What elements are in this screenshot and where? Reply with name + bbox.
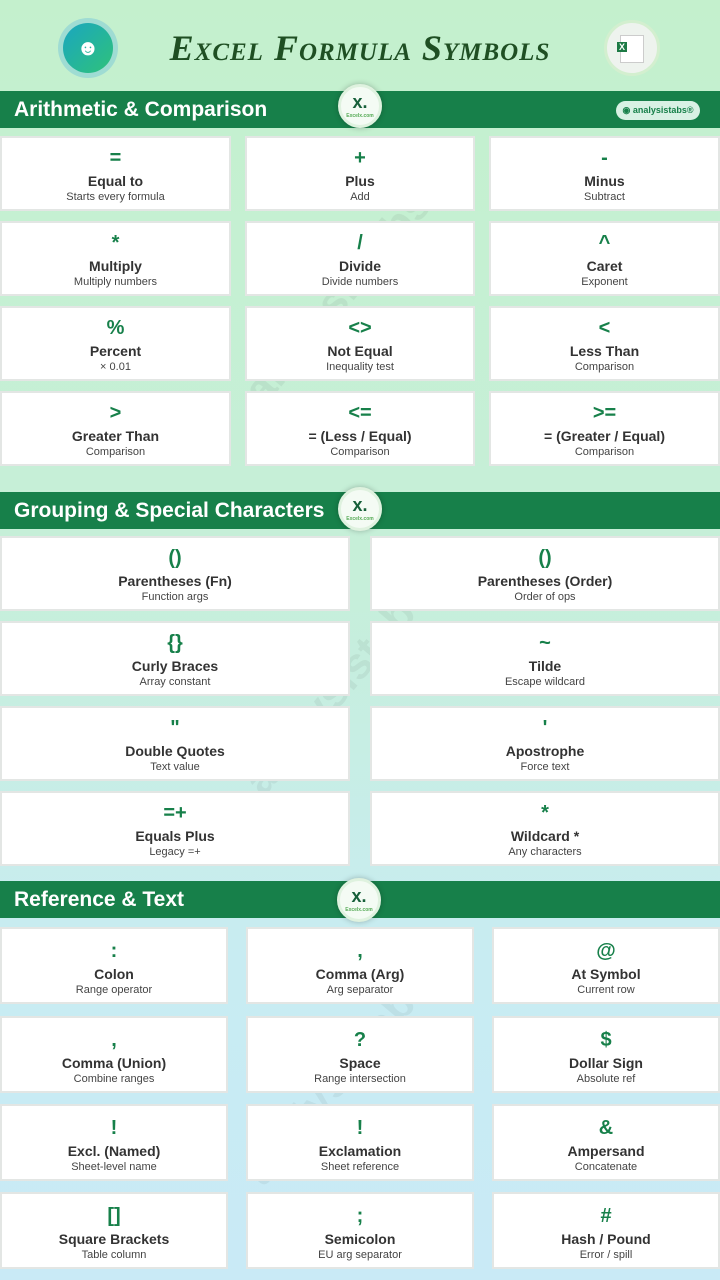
- panel: arithmetic cards: <: [599, 317, 610, 339]
- header icon: chat: ☻: [76, 35, 100, 60]
- panel: grouping cards: Legacy =+: [149, 846, 201, 858]
- panel: grouping cards: Equals Plus: [135, 828, 215, 844]
- panel: arithmetic cards: Comparison: [330, 446, 390, 458]
- logo: excelx 3: x.: [351, 886, 366, 906]
- panel: grouping cards: ~: [539, 632, 551, 654]
- panel: grouping cards: ": [170, 717, 180, 739]
- panel: grouping cards: (): [538, 547, 552, 569]
- text: analysistabs®: [234, 935, 462, 1194]
- panel: reference cards: Dollar Sign: [569, 1055, 643, 1071]
- panel: grouping cards: Curly Braces: [132, 658, 218, 674]
- panel: reference cards: Table column: [82, 1249, 146, 1261]
- panel: reference cards: #: [600, 1205, 612, 1227]
- panel: reference cards: Square Brackets: [59, 1231, 169, 1247]
- panel: arithmetic cards: Greater Than: [72, 428, 159, 444]
- banner: Grouping & Special Characters: [0, 492, 720, 529]
- panel: arithmetic cards: /: [357, 232, 363, 254]
- panel: reference cards: [0, 927, 720, 1269]
- panel: arithmetic cards: Add: [350, 191, 370, 203]
- banner: Grouping & Special Characters: Grouping & Special Characters: [14, 499, 324, 522]
- panel: reference cards: Sheet-level name: [71, 1161, 157, 1173]
- panel: arithmetic cards: Inequality test: [326, 361, 394, 373]
- panel: grouping cards: Any characters: [508, 846, 582, 858]
- logo: excelx 2: x.: [352, 495, 368, 515]
- panel: arithmetic cards: Plus: [345, 173, 375, 189]
- panel: arithmetic cards: Minus: [584, 173, 625, 189]
- panel: grouping cards: ': [543, 717, 547, 739]
- panel: grouping cards: Parentheses (Fn): [118, 573, 232, 589]
- panel: reference cards: &: [599, 1117, 613, 1139]
- panel: reference cards: Ampersand: [567, 1143, 645, 1159]
- panel: reference cards: @: [596, 940, 616, 962]
- panel: grouping cards: *: [541, 802, 549, 824]
- header icon: chat: [58, 18, 118, 78]
- panel: reference cards: Excl. (Named): [68, 1143, 160, 1159]
- panel: arithmetic cards: Equal to: [88, 173, 143, 189]
- panel: arithmetic cards: Divide: [339, 258, 381, 274]
- panel: reference cards: Error / spill: [580, 1249, 632, 1261]
- panel: reference cards: ?: [354, 1029, 366, 1051]
- panel: arithmetic cards: Multiply numbers: [74, 276, 157, 288]
- panel: reference cards: Exclamation: [319, 1143, 401, 1159]
- logo: excelx 3: Excelx.com: [345, 907, 373, 913]
- panel: grouping cards: =+: [163, 802, 187, 824]
- panel: reference cards: Space: [339, 1055, 381, 1071]
- panel: arithmetic cards: Caret: [587, 258, 622, 274]
- logo: analysistabs: ◉ analysistabs®: [622, 105, 694, 115]
- panel: arithmetic cards: =: [110, 147, 121, 169]
- panel: grouping cards: Parentheses (Order): [478, 573, 612, 589]
- panel: reference cards: Current row: [577, 984, 635, 996]
- panel: grouping cards: [0, 536, 720, 866]
- panel: reference cards: !: [111, 1117, 117, 1139]
- title: Excel Formula Symbols: [170, 28, 550, 68]
- header icon: excel file: X: [619, 42, 625, 52]
- panel: grouping cards: Double Quotes: [125, 743, 225, 759]
- panel: arithmetic cards: Not Equal: [327, 343, 393, 359]
- panel: grouping cards: {}: [167, 632, 183, 654]
- panel: reference cards: $: [600, 1029, 612, 1051]
- panel: reference cards: Hash / Pound: [561, 1231, 651, 1247]
- panel: arithmetic cards: >=: [593, 402, 616, 424]
- panel: arithmetic cards: Comparison: [86, 446, 145, 458]
- panel: reference cards: Colon: [94, 966, 134, 982]
- panel: arithmetic cards: Exponent: [581, 276, 628, 288]
- banner: Arithmetic & Comparison: [0, 91, 720, 128]
- panel: arithmetic cards: Less Than: [570, 343, 639, 359]
- watermarks: analysistabs®: [234, 155, 462, 414]
- panel: grouping cards: Text value: [150, 761, 200, 773]
- panel: arithmetic cards: <=: [348, 402, 372, 424]
- panel: reference cards: Sheet reference: [321, 1161, 399, 1173]
- panel: arithmetic cards: [0, 136, 720, 466]
- panel: arithmetic cards: = (Greater / Equal): [544, 428, 665, 444]
- logo: excelx: Excelx.com: [346, 113, 374, 119]
- panel: grouping cards: Apostrophe: [506, 743, 584, 759]
- banner: Arithmetic & Comparison: Arithmetic & Comparison: [14, 98, 267, 121]
- panel: reference cards: At Symbol: [571, 966, 641, 982]
- panel: grouping cards: Function args: [142, 591, 208, 603]
- panel: reference cards: ,: [111, 1029, 117, 1051]
- banner: Reference & Text: Reference & Text: [14, 888, 184, 911]
- panel: reference cards: Range intersection: [314, 1073, 406, 1085]
- panel: arithmetic cards: Divide numbers: [322, 276, 398, 288]
- panel: reference cards: Semicolon: [325, 1231, 395, 1247]
- logo: excelx 2: [338, 487, 382, 531]
- panel: grouping cards: Force text: [521, 761, 569, 773]
- logo: analysistabs: [616, 101, 700, 120]
- panel: grouping cards: Array constant: [140, 676, 210, 688]
- panel: arithmetic cards: = (Less / Equal): [308, 428, 412, 444]
- panel: reference cards: Comma (Arg): [316, 966, 404, 982]
- panel: reference cards: ,: [357, 940, 363, 962]
- banner: Reference & Text: [0, 881, 720, 918]
- panel: arithmetic cards: %: [107, 317, 124, 339]
- logo: excelx: [338, 84, 382, 128]
- panel: grouping cards: Escape wildcard: [505, 676, 585, 688]
- panel: arithmetic cards: *: [112, 232, 119, 254]
- panel: arithmetic cards: Comparison: [575, 361, 634, 373]
- panel: arithmetic cards: -: [601, 147, 608, 169]
- panel: arithmetic cards: Subtract: [584, 191, 625, 203]
- panel: arithmetic cards: ^: [599, 232, 610, 254]
- panel: reference cards: Combine ranges: [74, 1073, 154, 1085]
- panel: grouping cards: Tilde: [529, 658, 561, 674]
- panel: arithmetic cards: +: [354, 147, 366, 169]
- logo: excelx 3: [337, 878, 381, 922]
- panel: reference cards: ;: [357, 1205, 363, 1227]
- panel: grouping cards: Wildcard *: [511, 828, 579, 844]
- panel: reference cards: Absolute ref: [577, 1073, 635, 1085]
- panel: grouping cards: Order of ops: [514, 591, 576, 603]
- panel: arithmetic cards: Multiply: [89, 258, 142, 274]
- panel: arithmetic cards: <>: [348, 317, 372, 339]
- logo: excelx: x.: [352, 92, 368, 112]
- panel: arithmetic cards: Comparison: [575, 446, 634, 458]
- panel: arithmetic cards: Percent: [90, 343, 141, 359]
- panel: arithmetic cards: >: [110, 402, 121, 424]
- header icon: excel file: [604, 20, 660, 76]
- panel: arithmetic cards: × 0.01: [100, 361, 131, 373]
- panel: reference cards: EU arg separator: [318, 1249, 402, 1261]
- logo: excelx 2: Excelx.com: [346, 516, 374, 522]
- panel: reference cards: Range operator: [76, 984, 152, 996]
- panel: arithmetic cards: Starts every formula: [66, 191, 165, 203]
- text: analysistabs®: [234, 545, 462, 804]
- panel: reference cards: :: [111, 940, 117, 962]
- panel: reference cards: Concatenate: [575, 1161, 637, 1173]
- panel: reference cards: Arg separator: [327, 984, 393, 996]
- panel: reference cards: []: [107, 1205, 121, 1227]
- panel: reference cards: !: [357, 1117, 363, 1139]
- panel: grouping cards: (): [168, 547, 182, 569]
- panel: reference cards: Comma (Union): [62, 1055, 166, 1071]
